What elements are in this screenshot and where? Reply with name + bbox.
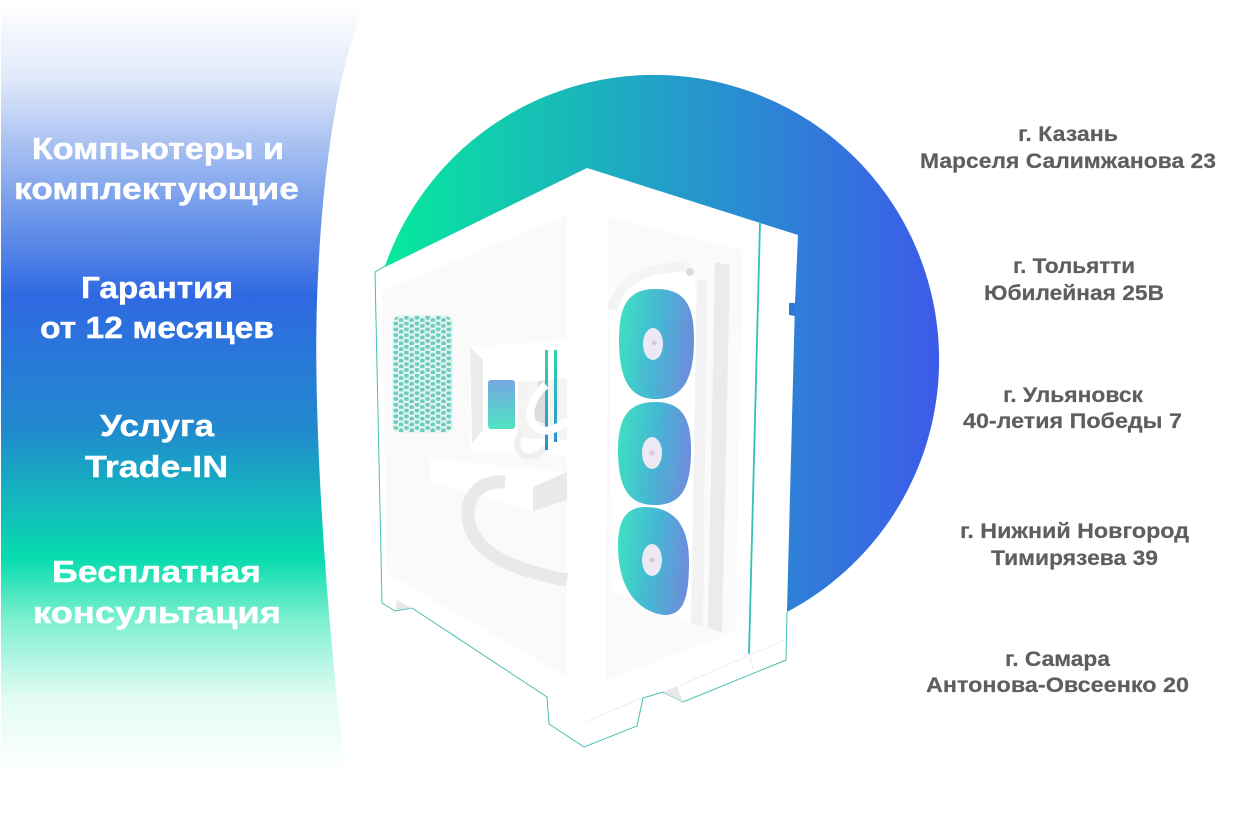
heading: free consultation: консультация	[33, 595, 281, 630]
fan 3	[618, 507, 689, 615]
teal outline of case	[375, 265, 787, 747]
address: Tolyatti: г. Тольятти	[1013, 255, 1135, 278]
case body	[375, 168, 798, 747]
heading: computers and components: комплектующие	[14, 171, 299, 206]
honeycomb vent	[392, 315, 453, 433]
fan mount plate	[609, 268, 698, 625]
address: Kazan: г. Казань	[1018, 123, 1118, 146]
address: Nizhny Novgorod	[960, 520, 1189, 570]
teal front strip	[749, 223, 760, 654]
address: Samara	[926, 648, 1189, 697]
panel: left gradient sidebar	[1, 3, 366, 775]
heading: trade-in	[85, 408, 228, 484]
pump screen	[488, 380, 515, 429]
address: Ulyanovsk	[963, 384, 1182, 433]
heading: computers and components: Компьютеры и	[32, 131, 284, 166]
heading: warranty	[40, 270, 274, 345]
heading: warranty: Гарантия	[81, 270, 233, 305]
grey cable	[468, 482, 567, 580]
rear vent notch	[789, 303, 795, 316]
circle: gradient backdrop	[383, 75, 939, 612]
address: Nizhny Novgorod: г. Нижний Новгород	[960, 520, 1189, 543]
address: Tolyatti	[984, 255, 1164, 305]
case feet	[395, 600, 785, 723]
heading: free consultation: Бесплатная	[52, 554, 261, 589]
heading: warranty: от 12 месяцев	[40, 310, 274, 345]
fan 1	[619, 289, 694, 399]
front window	[606, 217, 743, 680]
address: Nizhny Novgorod: Тимирязева 39	[991, 547, 1158, 570]
address: Kazan	[920, 123, 1216, 173]
heading: trade-in: Trade-IN	[85, 449, 228, 484]
address: Ulyanovsk: г. Ульяновск	[1003, 384, 1144, 407]
fan 2	[618, 402, 691, 505]
side glass panel	[382, 215, 567, 677]
address: Ulyanovsk: 40-летия Победы 7	[963, 410, 1182, 433]
address: Kazan: Марселя Салимжанова 23	[920, 150, 1216, 173]
graphics card	[430, 459, 567, 511]
water cooling tubes	[517, 350, 567, 457]
address: Samara: г. Самара	[1005, 648, 1110, 671]
heading: free consultation	[33, 554, 281, 630]
heading: trade-in: Услуга	[100, 408, 215, 443]
radiator strips	[612, 262, 730, 632]
illustration: white PC case	[375, 168, 798, 747]
address: Samara: Антонова-Овсеенко 20	[926, 674, 1189, 697]
motherboard area	[470, 340, 567, 455]
heading: computers and components	[14, 131, 299, 206]
address: Tolyatti: Юбилейная 25В	[984, 282, 1164, 305]
